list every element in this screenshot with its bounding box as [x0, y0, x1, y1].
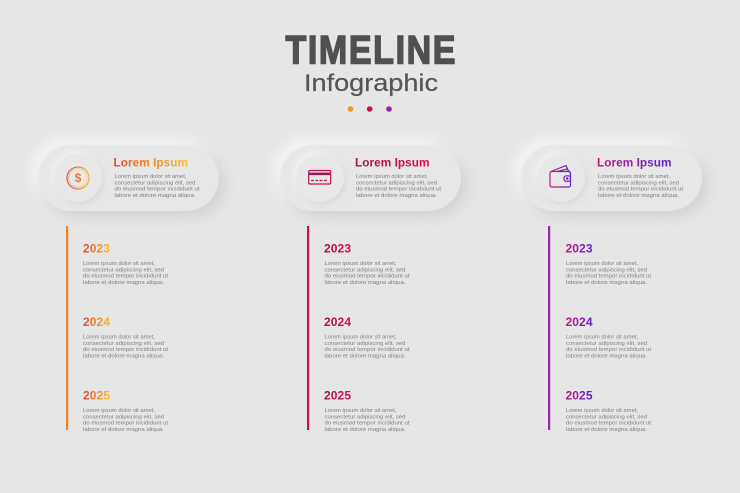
entry: column 1, 2023: labore et dolore magna aliqua.	[83, 280, 164, 286]
entry: column 2, 2024	[324, 315, 410, 359]
entry: column 3, 2024	[566, 315, 651, 359]
entry: column 1, 2024	[83, 315, 168, 359]
entry: column 1, 2024: 2024	[83, 315, 110, 329]
entry: column 2, 2025: labore et dolore magna aliqua.	[324, 427, 406, 433]
text block: column 2 header: consectetur adipiscing elit, sed	[356, 180, 437, 186]
text block: column 3 header: do eiusmod tempor incididunt ut	[598, 187, 683, 193]
entry: column 1, 2024: Lorem ipsum dolor sit amet,	[83, 334, 155, 340]
text block: column 1 header: labore et dolore magna aliqua.	[114, 193, 196, 199]
text block: column 2 header: do eiusmod tempor incididunt ut	[356, 187, 441, 193]
entry: column 2, 2025: 2025	[324, 388, 351, 402]
text block: column 2 header: Lorem ipsum dolor sit amet,	[356, 174, 428, 180]
entry: column 3, 2024: consectetur adipiscing elit, sed	[566, 341, 647, 347]
entry: column 2, 2025: do eiusmod tempor incididunt ut	[324, 421, 410, 427]
panel: column 3 header pill	[515, 139, 708, 217]
entry: column 1, 2025: do eiusmod tempor incididunt ut	[83, 421, 168, 427]
entry: column 2, 2023: do eiusmod tempor incididunt ut	[324, 274, 410, 280]
entry: column 3, 2025: 2025	[566, 388, 593, 402]
entry: column 1, 2023	[83, 241, 168, 286]
icon: dollar coin	[67, 167, 89, 189]
panel: column 1 timeline	[66, 226, 168, 433]
heading: column 3: Lorem Ipsum	[597, 156, 672, 170]
entry: column 1, 2024: consectetur adipiscing elit, sed	[83, 341, 164, 347]
title: TIMELINE	[286, 28, 456, 72]
entry: column 3, 2024: Lorem ipsum dolor sit amet,	[566, 334, 638, 340]
decorative dots	[348, 106, 392, 112]
entry: column 1, 2023: Lorem ipsum dolor sit amet,	[83, 261, 155, 267]
entry: column 2, 2023: consectetur adipiscing elit, sed	[324, 267, 406, 273]
text block: column 3 header: labore et dolore magna aliqua.	[598, 193, 679, 199]
entry: column 2, 2024: 2024	[324, 315, 351, 329]
entry: column 1, 2025	[83, 388, 168, 433]
icon: wallet	[550, 166, 570, 187]
panel: column 1 header pill	[32, 139, 225, 217]
text block: column 2 header	[356, 174, 441, 199]
entry: column 2, 2023	[324, 241, 410, 286]
heading: column 1: Lorem Ipsum	[114, 156, 188, 170]
entry: column 1, 2024: labore et dolore magna aliqua.	[83, 353, 164, 359]
heading: column 2: Lorem Ipsum	[355, 156, 430, 170]
entry: column 1, 2023: consectetur adipiscing elit, sed	[83, 267, 164, 273]
entry: column 3, 2025	[566, 388, 651, 433]
entry: column 3, 2025: consectetur adipiscing elit, sed	[566, 414, 647, 420]
timeline bar: column 3	[548, 226, 550, 430]
entry: column 3, 2023	[566, 241, 651, 286]
entry: column 1, 2025: labore et dolore magna aliqua.	[83, 427, 164, 433]
subtitle: Infographic	[304, 70, 438, 97]
entry: column 2, 2024: Lorem ipsum dolor sit amet,	[324, 334, 397, 340]
entry: column 3, 2024: 2024	[566, 315, 593, 329]
entry: column 3, 2023: consectetur adipiscing elit, sed	[566, 267, 647, 273]
panel: column 2 timeline	[307, 226, 410, 433]
entry: column 2, 2024: consectetur adipiscing elit, sed	[324, 341, 406, 347]
entry: column 3, 2024: do eiusmod tempor incididunt ut	[566, 347, 651, 353]
text block: column 1 header: Lorem ipsum dolor sit amet,	[114, 174, 187, 180]
entry: column 1, 2025: Lorem ipsum dolor sit amet,	[83, 408, 155, 414]
entry: column 3, 2023: Lorem ipsum dolor sit amet,	[566, 261, 638, 267]
entry: column 3, 2023: labore et dolore magna aliqua.	[566, 280, 647, 286]
entry: column 2, 2024: labore et dolore magna aliqua.	[324, 353, 406, 359]
entry: column 2, 2024: do eiusmod tempor incididunt ut	[324, 347, 410, 353]
entry: column 3, 2025: do eiusmod tempor incididunt ut	[566, 421, 651, 427]
entry: column 1, 2025: 2025	[83, 388, 110, 402]
entry: column 2, 2025: consectetur adipiscing elit, sed	[324, 414, 406, 420]
text block: column 3 header: Lorem ipsum dolor sit amet,	[598, 174, 670, 180]
text block: column 1 header: do eiusmod tempor incididunt ut	[114, 187, 200, 193]
text block: column 1 header: consectetur adipiscing elit, sed	[114, 180, 196, 186]
entry: column 3, 2025: Lorem ipsum dolor sit amet,	[566, 408, 638, 414]
panel: column 2 header pill	[274, 139, 467, 217]
entry: column 1, 2024: do eiusmod tempor incididunt ut	[83, 347, 168, 353]
text block: column 3 header: consectetur adipiscing elit, sed	[598, 180, 679, 186]
entry: column 3, 2023: do eiusmod tempor incididunt ut	[566, 274, 651, 280]
panel: column 3 timeline	[548, 226, 651, 433]
entry: column 2, 2025	[324, 388, 410, 433]
entry: column 1, 2023: do eiusmod tempor incididunt ut	[83, 274, 168, 280]
text block: column 3 header	[598, 174, 683, 199]
entry: column 2, 2023: Lorem ipsum dolor sit amet,	[324, 261, 397, 267]
entry: column 2, 2023: labore et dolore magna aliqua.	[324, 280, 406, 286]
text block: column 2 header: labore et dolore magna aliqua.	[356, 193, 437, 199]
entry: column 3, 2023: 2023	[566, 241, 593, 255]
timeline bar: column 1	[66, 226, 68, 430]
entry: column 2, 2025: Lorem ipsum dolor sit amet,	[324, 408, 397, 414]
entry: column 3, 2024: labore et dolore magna aliqua.	[566, 353, 647, 359]
entry: column 1, 2025: consectetur adipiscing elit, sed	[83, 414, 164, 420]
entry: column 3, 2025: labore et dolore magna aliqua.	[566, 427, 647, 433]
text block: column 1 header	[114, 174, 200, 199]
icon: dollar coin: $	[75, 171, 82, 185]
icon: credit card	[309, 170, 331, 184]
entry: column 2, 2023: 2023	[324, 241, 351, 255]
entry: column 1, 2023: 2023	[83, 241, 110, 255]
timeline bar: column 2	[307, 226, 309, 430]
